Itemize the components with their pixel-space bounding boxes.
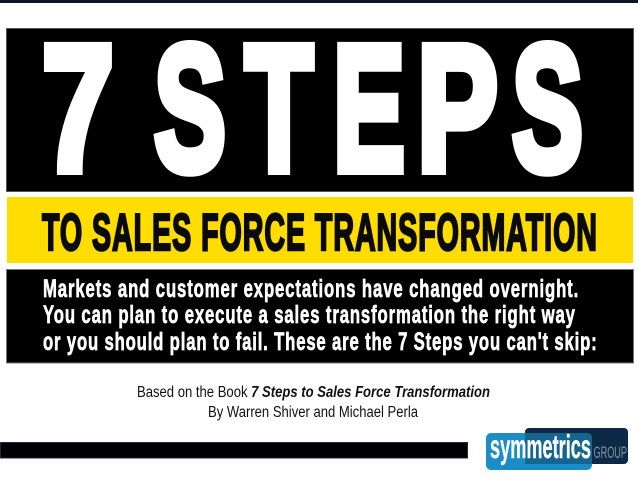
panel: subtitle band bbox=[7, 197, 633, 263]
top bar bbox=[0, 0, 638, 3]
title: 7 STEPS: P bbox=[417, 8, 498, 208]
title: 7 STEPS: S bbox=[512, 8, 583, 208]
title: 7 STEPS: S bbox=[154, 8, 226, 208]
bottom bar bbox=[0, 442, 468, 458]
subtitle: TO SALES FORCE TRANSFORMATION bbox=[42, 203, 597, 261]
intro line 3: or you should plan to fail. These are the 7 Steps you can't skip: bbox=[43, 328, 597, 356]
panel: title bbox=[6, 8, 634, 208]
credit line 2: By Warren Shiver and Michael Perla bbox=[208, 404, 418, 421]
intro line 2: You can plan to execute a sales transformation the right way bbox=[43, 301, 575, 329]
title: 7 STEPS: E bbox=[333, 8, 405, 208]
book credit bbox=[137, 384, 490, 421]
title: 7 STEPS: T bbox=[245, 8, 313, 208]
title: 7 STEPS: 7 bbox=[42, 8, 114, 208]
logo: symmetrics group bbox=[486, 428, 628, 470]
credit line 1: Based on the Book 7 Steps to Sales Force Transformation bbox=[137, 384, 490, 401]
panel: intro text bbox=[6, 270, 634, 363]
intro line 1: Markets and customer expectations have changed overnight. bbox=[43, 275, 578, 303]
